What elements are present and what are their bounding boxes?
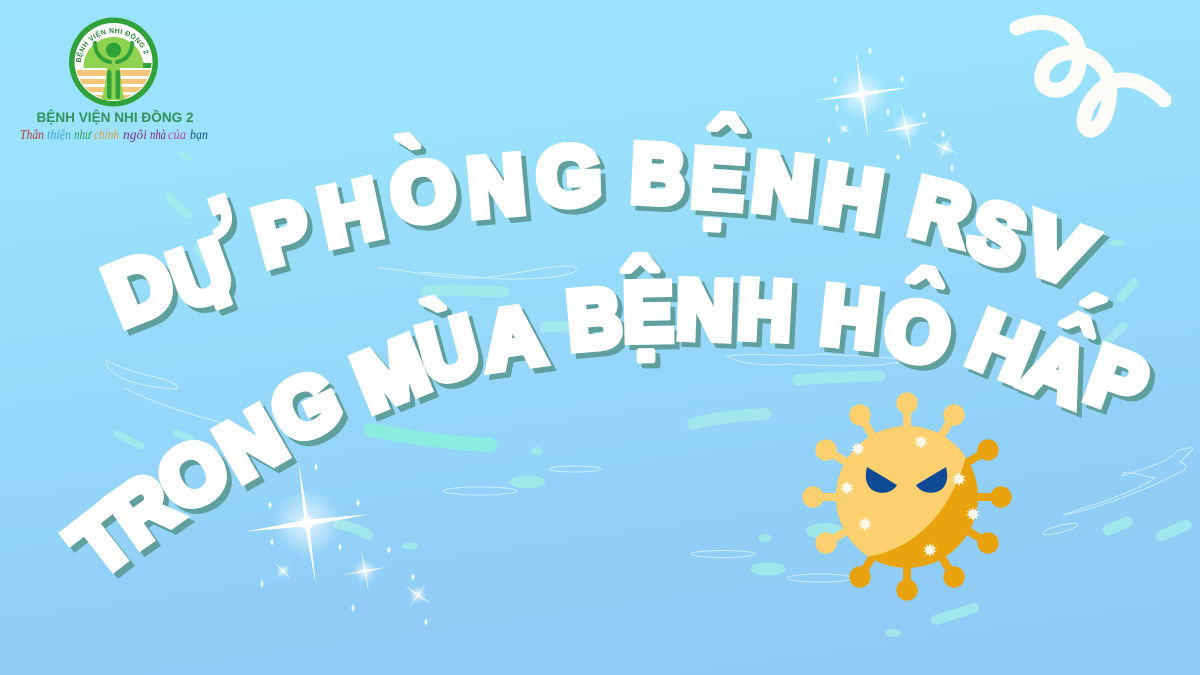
- virus spikes: dark: [849, 439, 1012, 601]
- mint brush strokes: [117, 154, 1186, 620]
- title line 1: O: [385, 143, 461, 242]
- title line 2: M: [342, 319, 440, 429]
- slogan: Thân: [20, 127, 44, 142]
- virus eyes: [866, 467, 947, 493]
- title line 2: ̀: [420, 295, 445, 314]
- title line 2: ̣: [639, 350, 653, 361]
- title line 1: B: [629, 126, 687, 221]
- title line 1: [93, 112, 1103, 344]
- slogan: thiện: [47, 127, 71, 142]
- title line 1: U: [159, 221, 243, 326]
- title line 2: E: [623, 265, 673, 358]
- title line 2: N: [675, 263, 735, 356]
- title line 2: R: [94, 456, 192, 563]
- sparkles: [237, 42, 965, 626]
- title line 1: ̛: [203, 194, 238, 239]
- title line 2: O: [143, 420, 244, 531]
- title line 1: D: [93, 232, 187, 344]
- slogan: ngôi: [123, 127, 147, 142]
- title line 1: ̀: [395, 133, 419, 150]
- virus body: [836, 426, 978, 568]
- title line 1: H: [312, 163, 389, 264]
- title line 1: N: [749, 136, 817, 233]
- title line 1: S: [959, 182, 1036, 285]
- title line 2: U: [409, 298, 487, 401]
- title line 2: ́: [1081, 290, 1106, 312]
- title line 2: [54, 254, 1158, 593]
- title line 1: ̣: [705, 219, 720, 230]
- title line 1: ̂: [709, 112, 747, 131]
- title line 1: E: [689, 131, 747, 226]
- mint blobs: [402, 240, 1124, 637]
- title line 1: V: [1012, 196, 1103, 304]
- slogan: bạn: [190, 127, 208, 142]
- icon: round emblem: [69, 18, 158, 106]
- title line 1: G: [536, 130, 603, 223]
- title line 2: H: [817, 268, 883, 365]
- title line 1: H: [815, 148, 888, 247]
- virus white spots: [840, 435, 980, 557]
- title line 1: P: [246, 182, 319, 284]
- title line 1: ̣: [214, 293, 231, 308]
- title line 2: H: [958, 294, 1047, 401]
- slogan: chính: [94, 127, 119, 142]
- logo: hospital emblem and name: [20, 18, 208, 142]
- title line 2: A: [478, 289, 549, 388]
- hospital name: BỆNH VIỆN NHI ĐỒNG 2: [36, 110, 194, 125]
- title line 2: P: [1076, 329, 1158, 433]
- slogan: [20, 127, 208, 142]
- title line 2: B: [564, 270, 625, 367]
- icon: round emblem: BỆNH VIỆN NHI ĐỒNG 2: [76, 28, 148, 62]
- title line 1: R: [902, 161, 979, 263]
- title line 1: N: [464, 138, 528, 234]
- virus spikes: light: [802, 392, 965, 554]
- slogan: nhà: [150, 127, 166, 142]
- title line 2: O: [878, 282, 957, 383]
- icon: angry yellow virus: [802, 392, 1012, 601]
- title line 2: G: [258, 353, 354, 462]
- title line 2: ̂: [1060, 308, 1101, 338]
- thin outline waves: [106, 266, 1193, 582]
- title line 2: ̂: [622, 254, 659, 271]
- title line 2: N: [203, 390, 300, 498]
- title line 2: H: [736, 262, 794, 357]
- title line 2: A: [1013, 317, 1102, 424]
- slogan: như: [74, 127, 92, 142]
- title line 2: ̂: [907, 264, 947, 287]
- slogan: của: [168, 127, 186, 142]
- title line 2: T: [54, 491, 149, 593]
